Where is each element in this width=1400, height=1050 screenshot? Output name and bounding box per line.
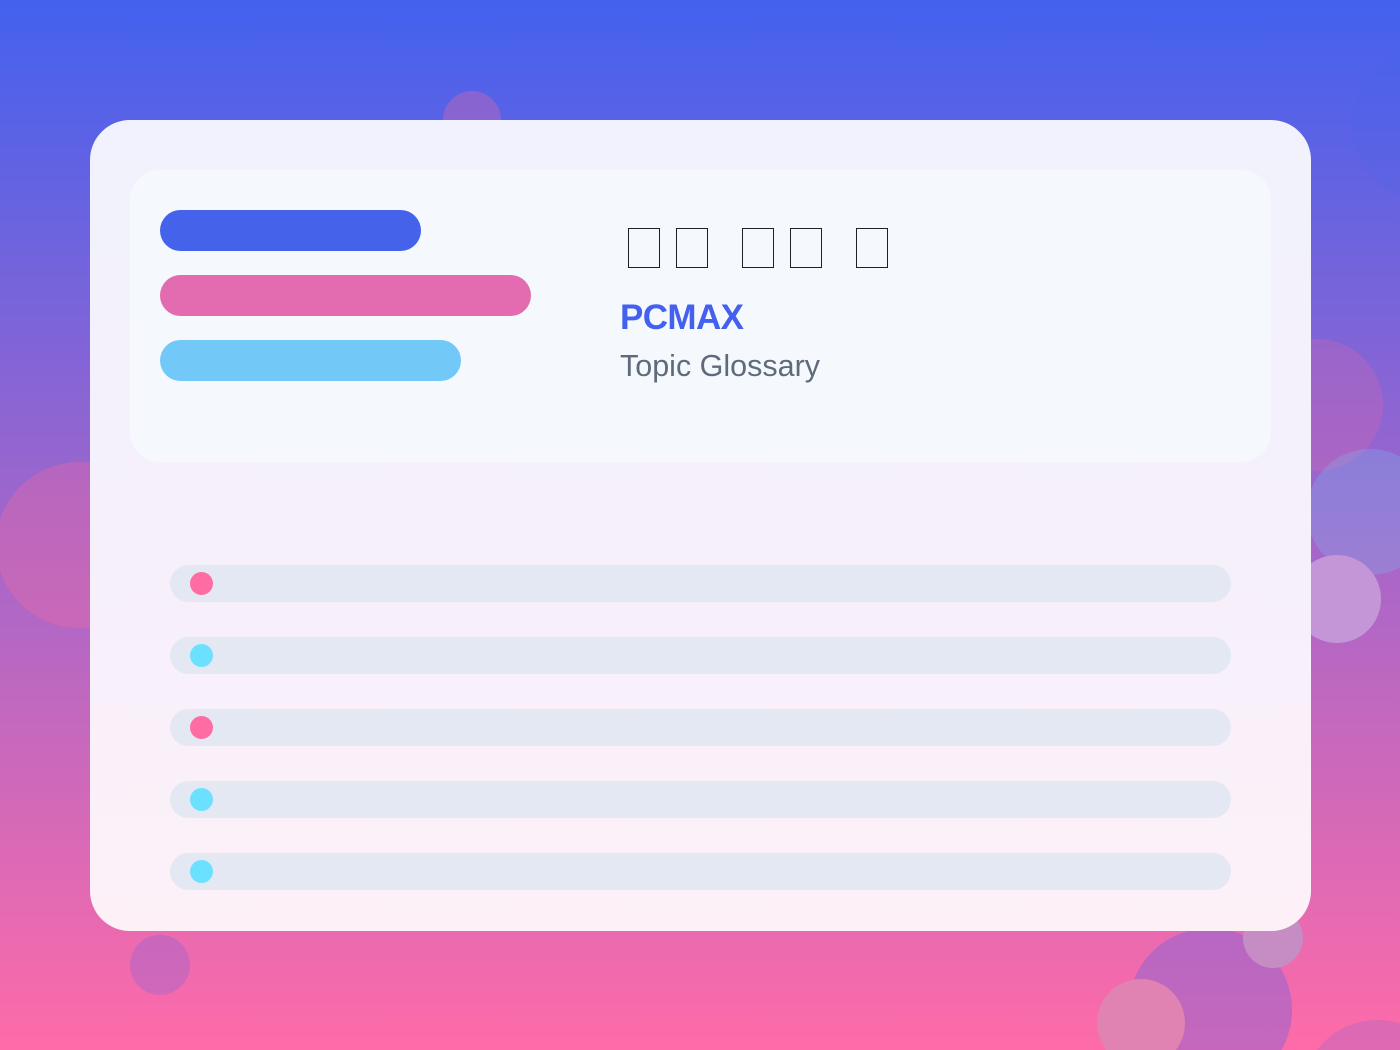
subtitle: Topic Glossary <box>620 349 820 383</box>
bullet: pink <box>190 572 213 595</box>
title: placeholder glyph boxes <box>628 228 888 268</box>
bar: pink <box>160 275 531 316</box>
list row 5 <box>170 853 1231 890</box>
bar: blue <box>160 210 421 251</box>
bullet: cyan <box>190 644 213 667</box>
brand name: PCMAX <box>620 298 743 337</box>
list row 4 <box>170 781 1231 818</box>
list row 2 <box>170 637 1231 674</box>
panel: header <box>130 170 1271 462</box>
list row 3 <box>170 709 1231 746</box>
list row 1 <box>170 565 1231 602</box>
bullet: cyan <box>190 860 213 883</box>
bar: light blue <box>160 340 461 381</box>
bullet: pink <box>190 716 213 739</box>
bullet: cyan <box>190 788 213 811</box>
panel: main card <box>90 120 1311 931</box>
